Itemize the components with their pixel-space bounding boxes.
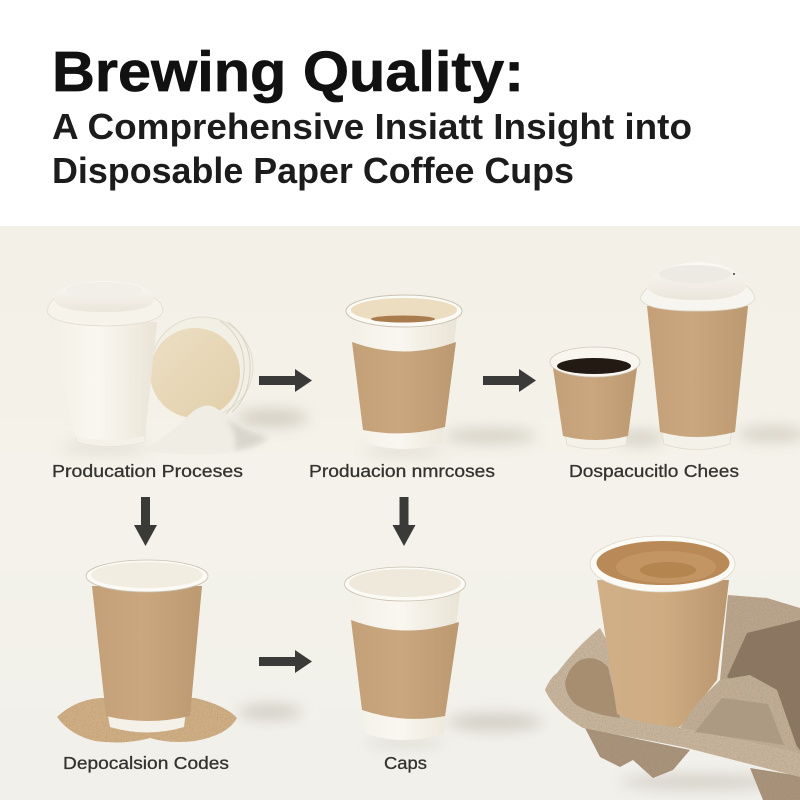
coffee [371, 316, 435, 322]
tray back [720, 595, 800, 760]
tray front legs [585, 728, 690, 778]
cup body [350, 592, 460, 740]
powder pile [140, 406, 270, 455]
cup rim [86, 560, 208, 592]
white cup base [74, 430, 146, 446]
subtitle line one: A Comprehensive Insiatt Insight into [52, 106, 692, 147]
latte surface [596, 541, 730, 585]
coffee grounds pile [57, 698, 237, 742]
illustration: sleeved cup with coffee [346, 295, 462, 449]
title block [52, 40, 692, 191]
illustration: white cup with lid and powder [47, 281, 270, 455]
cup rim [550, 347, 640, 377]
arrow right two [483, 369, 536, 392]
illustration: kraft cup in grounds [57, 560, 237, 742]
label: caps: Caps [384, 753, 427, 773]
subtitle line two: Disposable Paper Coffee Cups [52, 150, 574, 191]
sip hole [733, 273, 735, 275]
cup interior [91, 562, 203, 588]
tray front hump [680, 675, 800, 753]
title: Brewing Quality: [52, 40, 524, 104]
content panel background [0, 226, 800, 800]
black coffee [557, 358, 631, 374]
illustration: sleeved empty cup [344, 567, 466, 740]
cup interior [351, 298, 457, 322]
cup body [647, 306, 748, 437]
cup rim [344, 567, 466, 601]
arrow down two [392, 497, 416, 546]
label: fourth process: Depocalsion Codes [63, 753, 229, 773]
white cup lid [47, 281, 163, 326]
illustration: small espresso cup [550, 347, 640, 449]
cup body [92, 586, 202, 721]
tray back well [727, 620, 800, 750]
tray left well [565, 658, 620, 718]
header background [0, 0, 800, 226]
arrow down one [134, 497, 157, 546]
label: production process: Producation Proceses [52, 461, 243, 481]
cardboard sleeve [352, 342, 456, 433]
arrow right three [259, 650, 312, 673]
cup interior [349, 569, 461, 597]
white cup body [50, 322, 157, 440]
cardboard sleeve [351, 620, 459, 719]
lid rim [640, 285, 755, 311]
label: second process: Produacion nmrcoses [309, 461, 495, 481]
cup rim [590, 536, 735, 592]
tray rim [545, 628, 800, 777]
illustration: latte cup in pulp tray [545, 536, 800, 800]
illustration: tall cup with lid [640, 262, 755, 450]
cup body [553, 368, 637, 440]
base ring [565, 432, 628, 449]
lid dome [647, 262, 746, 300]
arrow right one [259, 369, 312, 392]
cup shadows [61, 409, 800, 789]
latte cup body [597, 580, 729, 727]
fallen lid [150, 317, 253, 418]
base ring [107, 710, 186, 732]
label: third process: Dospacucitlo Chees [569, 461, 739, 481]
base ring [661, 428, 732, 450]
cup rim [346, 295, 462, 327]
cup body [351, 318, 457, 449]
